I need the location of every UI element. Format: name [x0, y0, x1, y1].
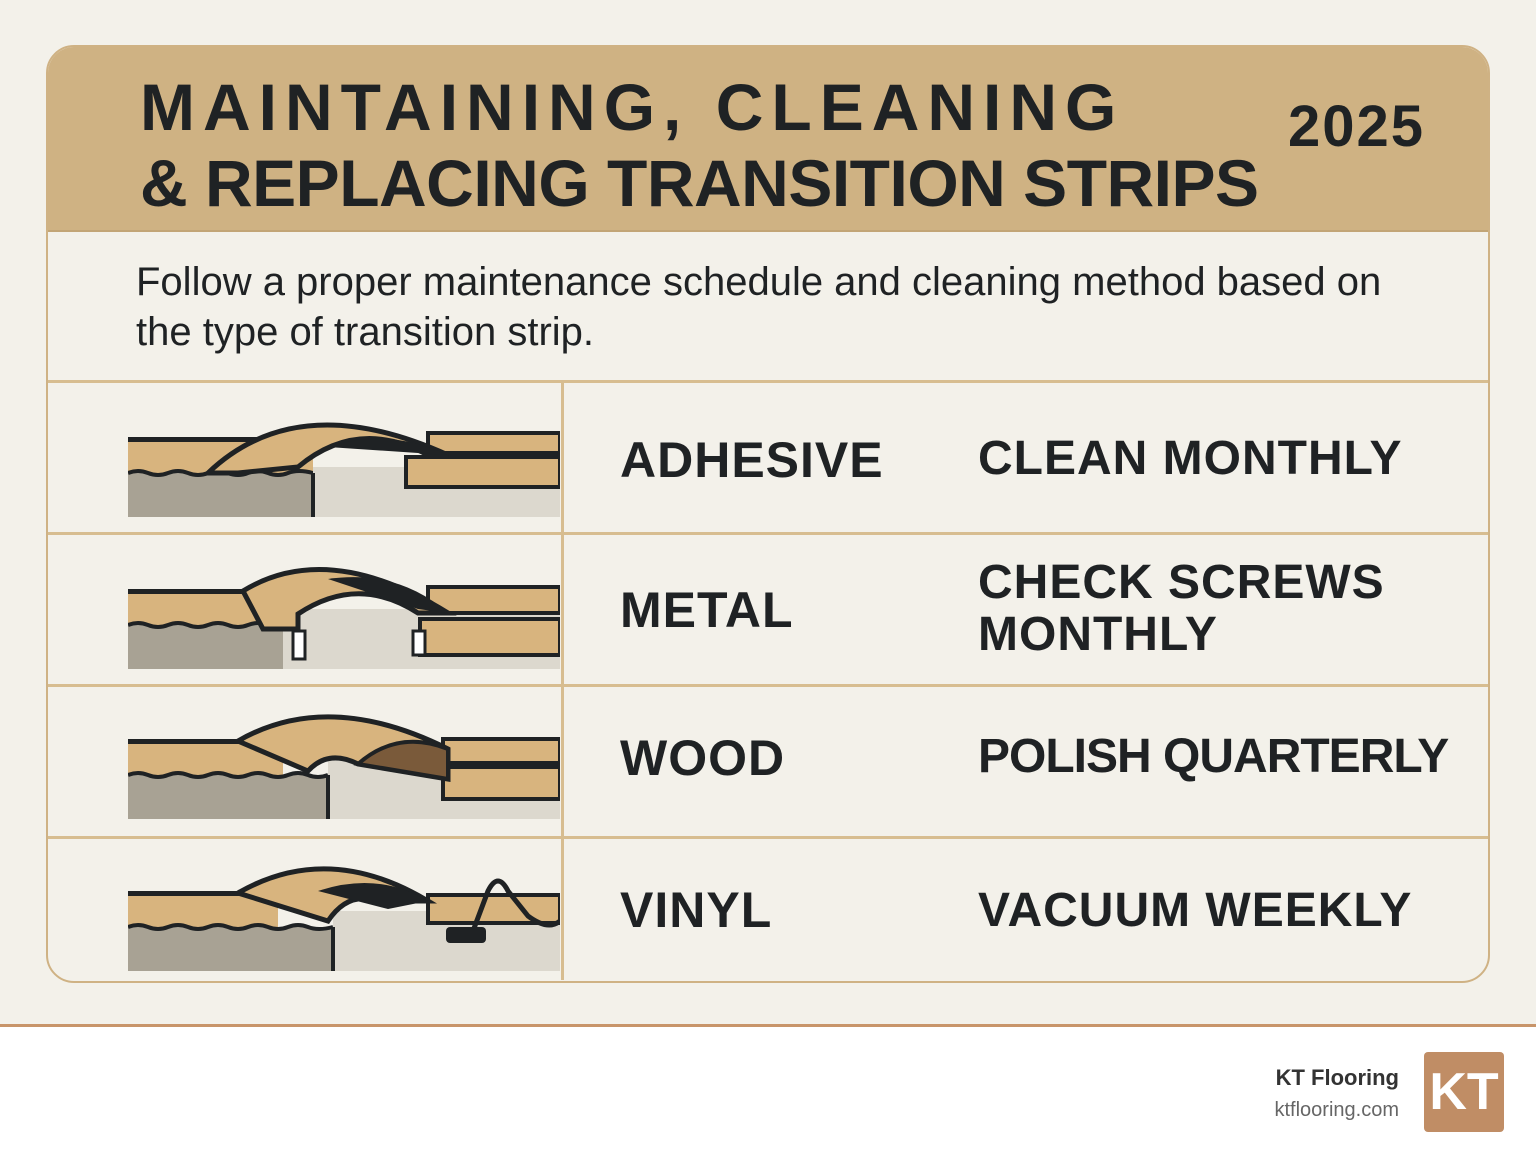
logo	[1424, 1052, 1504, 1132]
card	[46, 45, 1490, 983]
brand name: KT Flooring	[1276, 1065, 1399, 1090]
title line 1: MAINTAINING, CLEANING	[140, 70, 1124, 144]
title line 2: & REPLACING TRANSITION STRIPS	[140, 146, 1259, 220]
subtitle: Follow a proper maintenance schedule and cleaning method based on the type of transition strip.	[136, 260, 1381, 354]
label: VINYL	[620, 882, 772, 938]
header band	[48, 47, 1488, 232]
label: ADHESIVE	[620, 432, 884, 488]
row: adhesive	[48, 380, 1488, 533]
label: METAL	[620, 582, 793, 638]
illustration: wood	[128, 714, 560, 819]
action: CHECK SCREWS	[978, 556, 1385, 609]
action: MONTHLY	[978, 608, 1218, 661]
row: wood	[48, 684, 1488, 837]
action: CLEAN MONTHLY	[978, 432, 1403, 485]
row: metal	[48, 532, 1488, 685]
footer	[0, 1024, 1536, 1157]
action: VACUUM WEEKLY	[978, 884, 1412, 937]
action	[978, 556, 1385, 661]
illustration: metal	[128, 567, 560, 669]
year: 2025	[1288, 94, 1425, 159]
label: WOOD	[620, 730, 785, 786]
logo: KT	[1429, 1063, 1499, 1121]
row: vinyl	[48, 836, 1488, 989]
action: POLISH QUARTERLY	[978, 730, 1448, 783]
illustration: vinyl	[128, 866, 560, 971]
website: ktflooring.com	[1274, 1099, 1399, 1121]
illustration: adhesive	[128, 422, 560, 517]
